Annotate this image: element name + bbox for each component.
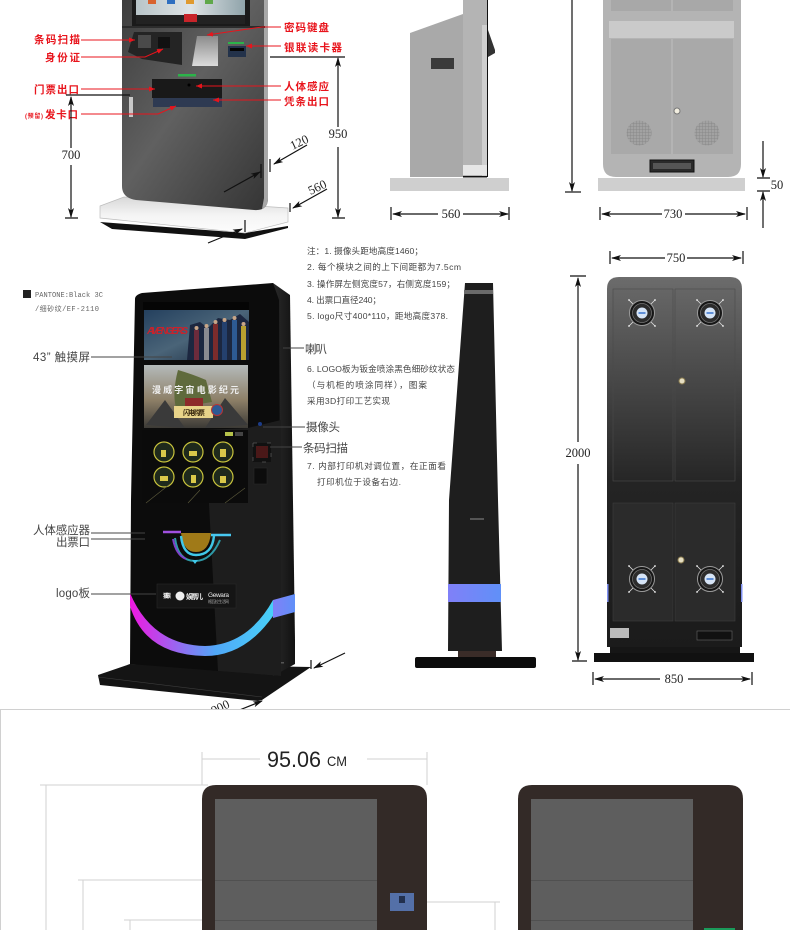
label: logo board: logo板 [56, 586, 90, 600]
main base [98, 664, 311, 701]
back cabinet [607, 277, 742, 647]
card reader [228, 42, 246, 57]
dimension 560 [208, 177, 329, 243]
port panel [650, 160, 694, 172]
pantone swatch note: /细砂纹/EF-2110 [35, 304, 99, 314]
side port [281, 662, 284, 664]
lower doors [613, 503, 735, 621]
label: body sensor: 人体感应 [284, 80, 330, 93]
note lines 1 to 5: 2. 每个模块之间的上下间距都为7.5cm [307, 261, 461, 272]
side base [415, 657, 536, 668]
barcode and ID reader block [128, 32, 182, 65]
lower doors [611, 39, 733, 154]
side cabinet [410, 14, 463, 177]
touch screen [122, 0, 265, 28]
logo board: 猫眼 [163, 592, 171, 600]
label: speaker [283, 342, 328, 356]
camera dot [258, 422, 262, 426]
ticket outlet emblem [163, 532, 231, 564]
width dimension 95.06 cm: 95.06 [267, 747, 321, 772]
label: body sensor [33, 523, 145, 537]
kiosk body [122, 0, 268, 210]
main kiosk depth dimensions [209, 653, 345, 718]
label: card dispenser [25, 106, 176, 121]
kiosk photo: top side view [390, 0, 509, 221]
kiosk photo: main black front view [98, 283, 311, 701]
back base [598, 178, 745, 191]
label: 43 inch touch screen: 43” 触摸屏 [33, 350, 90, 364]
back cabinet [603, 0, 741, 177]
kiosk photo: top back view [565, 0, 783, 228]
lower fans [628, 565, 724, 593]
ticket menu screen [142, 430, 248, 503]
dimension 700 [62, 95, 130, 218]
logo board: 格瓦拉生活网 [208, 598, 229, 604]
green tag [704, 928, 735, 930]
side light markers [607, 584, 742, 602]
label: keypad [207, 21, 330, 35]
left flat kiosk [202, 785, 427, 930]
dimension 560 [391, 207, 509, 221]
red callouts [25, 21, 342, 121]
dimension 850 [593, 672, 752, 686]
label: ID card [45, 49, 163, 64]
upper doors [613, 289, 735, 481]
side tower [448, 283, 502, 651]
kiosk photo: middle back view [566, 251, 754, 686]
side light band [448, 584, 501, 602]
kiosk base shadow [100, 222, 288, 239]
side window [431, 58, 454, 69]
long height line [565, 0, 581, 192]
dimension 560: 560 [306, 177, 329, 198]
label: 43 inch touch screen [33, 350, 172, 364]
note lines 1 to 5: 5. logo尺寸400*110，距地高度378. [307, 310, 448, 321]
height guide lines [40, 785, 500, 930]
pantone swatch note [23, 290, 103, 314]
blue logo tag [390, 893, 414, 911]
label: logo board [56, 586, 156, 600]
port panel [697, 631, 732, 640]
side bump [488, 30, 495, 57]
dimension 50 [757, 141, 783, 228]
second poster: 闪电购票 [183, 408, 205, 417]
label: ticket exit [56, 535, 145, 549]
dimension 750 [610, 251, 743, 265]
second poster [144, 365, 248, 428]
label: UnionPay card reader [246, 41, 342, 54]
panel: bottom flat elevation drawing [0, 710, 790, 930]
back base [594, 653, 754, 662]
right flat kiosk [518, 785, 743, 930]
kiosk photo: middle side view [415, 283, 536, 668]
label: camera [263, 420, 340, 434]
light strip [609, 21, 734, 38]
note 7: 打印机位于设备右边. [317, 476, 401, 487]
dimension 560: 560 [442, 207, 460, 221]
label: speaker: 喇叭 [305, 342, 328, 356]
dimension 50: 50 [771, 178, 783, 192]
ticket slot [152, 74, 222, 107]
width dimension 95.06 cm [202, 747, 427, 785]
curved light band [130, 593, 273, 656]
dimension 2000: 2000 [566, 446, 590, 460]
dimension 120 [224, 132, 311, 192]
barcode scanner [253, 443, 271, 484]
note 6: 6. LOGO板为钣金喷涂黑色细砂纹状态 [307, 363, 455, 374]
label: barcode scan: 条码扫描 [303, 441, 348, 455]
label: ticket exit [34, 83, 155, 96]
note lines 1 to 5: 4. 出票口直径240； [307, 294, 381, 305]
front reflection wedge [205, 420, 281, 676]
upper fans [628, 299, 724, 327]
card slot [129, 97, 133, 117]
note 7 [307, 460, 446, 487]
dimension 750: 750 [667, 251, 685, 265]
dimension 120: 120 [288, 132, 311, 153]
logo board [157, 584, 236, 608]
upper doors [611, 0, 733, 11]
tower [463, 0, 487, 177]
kiosk base [100, 197, 288, 233]
pantone swatch note: PANTONE:Black 3C [35, 292, 103, 300]
note 6: 采用3D打印工艺实现 [307, 395, 390, 406]
side neck [458, 651, 496, 658]
keypad [192, 36, 218, 66]
locks [678, 378, 685, 563]
second poster: 漫威宇宙电影纪元 [152, 384, 239, 395]
label: barcode scan [270, 441, 348, 455]
dimension 730: 730 [664, 207, 682, 221]
back neck [610, 647, 740, 653]
top poster [143, 302, 249, 360]
note lines 1 to 5: 3. 操作屏左侧宽度57，右侧宽度159； [307, 278, 455, 289]
label: card dispenser: 发卡口 [45, 108, 78, 121]
dimension 730 [600, 207, 747, 221]
panel: notes [307, 245, 461, 487]
vent grilles [626, 120, 720, 146]
dimension 850: 850 [665, 672, 683, 686]
label: camera: 摄像头 [306, 420, 340, 434]
label: UnionPay card reader: 银联读卡器 [284, 41, 342, 54]
note 7: 7. 内部打印机对调位置，在正面看 [307, 460, 446, 471]
main kiosk labels [33, 342, 348, 600]
label: card dispenser: (预留) [25, 112, 43, 120]
kiosk photo: top front view [100, 0, 288, 239]
logo board: Gewara [208, 592, 229, 599]
width dimension 95.06 cm: CM [327, 753, 347, 769]
side base [390, 178, 509, 191]
top front view dimensions [62, 57, 347, 243]
dimension 950 [270, 57, 347, 218]
panel background [0, 710, 790, 930]
side slot [470, 518, 484, 520]
spec label [610, 628, 629, 638]
label: receipt exit [213, 95, 329, 108]
note 6 [307, 363, 455, 406]
side light band [273, 594, 295, 618]
logo board: 娱票儿 [186, 592, 203, 601]
dimension 2000 [566, 276, 590, 661]
label: body sensor [196, 80, 330, 93]
main kiosk depth dimensions: 900 [209, 697, 232, 718]
note lines 1 to 5 [307, 245, 461, 321]
note lines 1 to 5: 注：1. 摄像头距地高度1460； [307, 245, 423, 256]
lock [674, 108, 680, 114]
dimension 700: 700 [62, 148, 80, 162]
label: ticket exit: 出票口 [56, 535, 90, 549]
label: barcode scan: 条码扫描 [34, 33, 80, 46]
label: body sensor: 人体感应器 [33, 523, 90, 537]
label: ticket exit: 门票出口 [34, 83, 79, 96]
note 6: （与机柜的喷涂同样），图案 [307, 379, 427, 390]
top poster: AVENGERS [146, 326, 188, 337]
dimension 950: 950 [329, 127, 347, 141]
label: ID card: 身份证 [45, 51, 80, 64]
label: receipt exit: 凭条出口 [284, 95, 329, 108]
label: barcode scan [34, 33, 135, 46]
main front face [130, 283, 281, 676]
label: keypad: 密码键盘 [284, 21, 330, 34]
main side face [273, 283, 295, 676]
